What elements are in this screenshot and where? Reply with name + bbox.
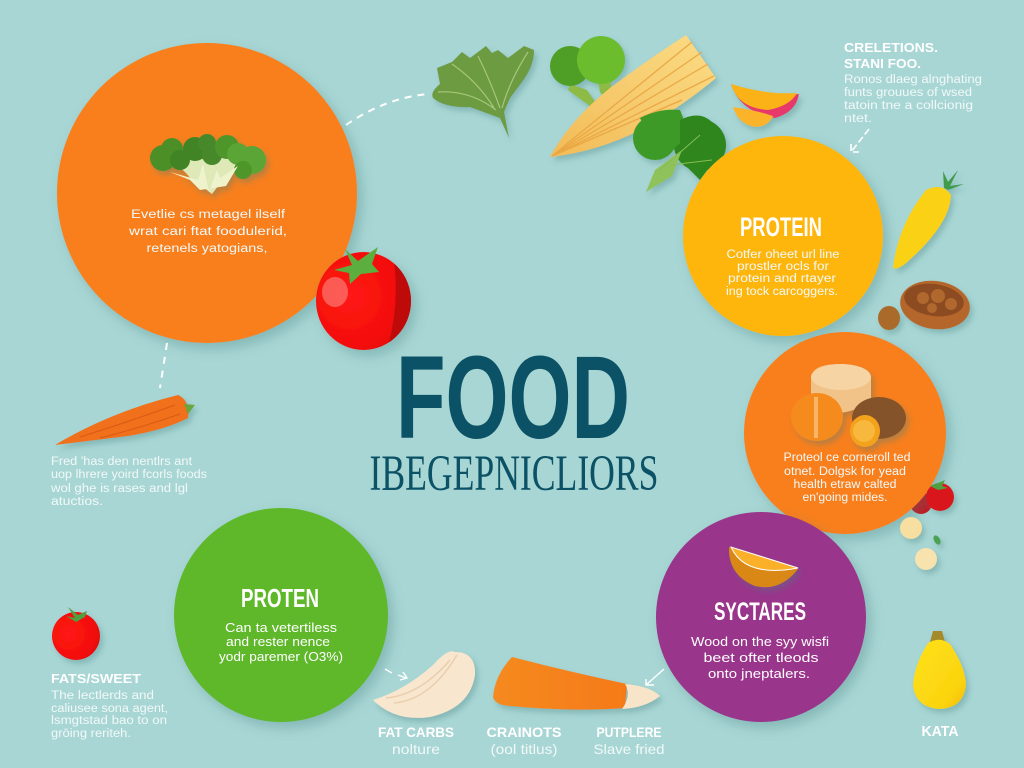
callout: top right note: STANI FOO. [844,56,921,71]
icon: spinach leaves [432,46,534,138]
text: protein body: protein and rtayer [728,273,836,285]
label: putplere: Slave fried [594,741,664,757]
text: fats sweet note: The lectlerds and [51,690,154,702]
text: orange circle right body: otnet. Dolgsk for yead [784,466,906,478]
icon: small tomato [926,480,954,511]
icon: orange wedge [729,547,798,587]
label: crainots: (ool titlus) [490,741,558,757]
text: green body: yodr paremer (O3%) [219,649,343,664]
icon: leafy greens [633,110,726,192]
text: carrot note: atuctios. [51,496,103,508]
text: carrot note: uop lhrere yoird fcorls foods [51,469,207,481]
callout: top right note: funts grouues of wsed [844,87,972,99]
icon: yellow carrot [893,170,964,268]
heading: syctares: SYCTARES [714,598,806,626]
label: crainots [486,724,562,757]
arrow: purple circle to carrot [646,669,664,685]
text: orange circle body [128,209,287,255]
subtitle: IBEGEPNICLIORS [370,446,658,502]
icon: brown nut bowl [897,276,973,334]
panel: orange circle right [744,332,946,534]
callout: top right note: tatoin tne a collcionig [844,100,973,112]
panel: purple circle [656,512,866,722]
text: fats sweet note: caliusee sona agent, [51,703,168,715]
text: orange circle right body: Proteol ce corneroll ted [784,452,910,464]
icon: pasta bundle [550,35,716,157]
text: orange circle body: Evetlie cs metagel ilself [131,209,286,221]
text: protein body: prostler ocls for [737,261,829,273]
text: fats sweet note: FATS/SWEET [51,671,141,686]
text: carrot note [50,456,207,508]
panel: large orange circle [57,43,357,343]
panel: green circle [174,508,388,722]
text: purple body: Wood on the syy wisfi [691,634,829,649]
callout: top right note: CRELETIONS. [844,40,938,55]
text: green body: and rester nence [226,634,330,649]
icon: cream balls [900,517,942,570]
dashed connector: orange circle to leaves [346,94,428,125]
text: orange circle body: wrat cari ftat foodulerid, [128,226,287,238]
icon: small nut [878,306,900,330]
text: fats sweet note [51,671,168,740]
icon: cream fat slices [373,651,475,718]
label: crainots: CRAINOTS [486,724,562,740]
arrow: green circle to fat [385,669,407,680]
icon: cheese and fruit [791,364,906,447]
text: orange circle right body: en'going mides. [802,492,888,504]
icon: mango slices [731,84,799,127]
panel: yellow protein circle [683,136,883,336]
text: protein body [726,249,840,298]
arrow: note to yellow circle [851,129,869,152]
label: kata: KATA [922,723,959,740]
label: fat carbs: FAT CARBS [378,724,454,740]
icon: orange carrot wedge [493,657,660,710]
text: orange circle right body [784,452,910,504]
text: green body: Can ta vetertiless [225,620,338,635]
dashed connector: orange circle to carrot [160,343,167,388]
callout: top right note: ntet. [844,113,872,125]
label: fat carbs [378,724,454,757]
text: carrot note: Fred 'has den nentlrs ant [51,456,193,468]
label: putplere: PUTPLERE [596,724,662,740]
title: FOOD: FOOD [396,332,630,464]
text: fats sweet note: grōing reriteh. [51,728,131,740]
text: green body [219,620,343,664]
heading: proten: PROTEN [241,583,319,613]
icon: tomato large [314,247,420,360]
label: putplere [594,724,664,757]
text: protein body: Cotfer oheet url line [726,249,840,261]
callout: top right note: Ronos dlaeg alnghating [844,74,982,86]
icon: carrot [55,395,195,445]
text: purple body: beet ofter tleods [704,650,819,665]
icon: broccoli floret [550,36,625,106]
text: fats sweet note: lsmgtstad bao to on [51,715,167,727]
label: fat carbs: nolture [392,741,440,757]
icon: broccoli [150,134,266,194]
text: orange circle right body: health etraw calted [794,479,896,491]
callout: top right note [844,40,982,125]
text: purple body [691,634,829,681]
icon: small tomato left [52,607,100,660]
text: protein body: ing tock carcoggers. [726,286,838,298]
icon: yellow pear [913,631,966,709]
small tomato behind orange circle [910,492,932,514]
text: orange circle body: retenels yatogians, [146,243,268,255]
heading: protein: PROTEIN [740,212,822,242]
text: purple body: onto jneptalers. [708,666,810,681]
text: carrot note: wol ghe is rases and lgl [50,483,188,495]
